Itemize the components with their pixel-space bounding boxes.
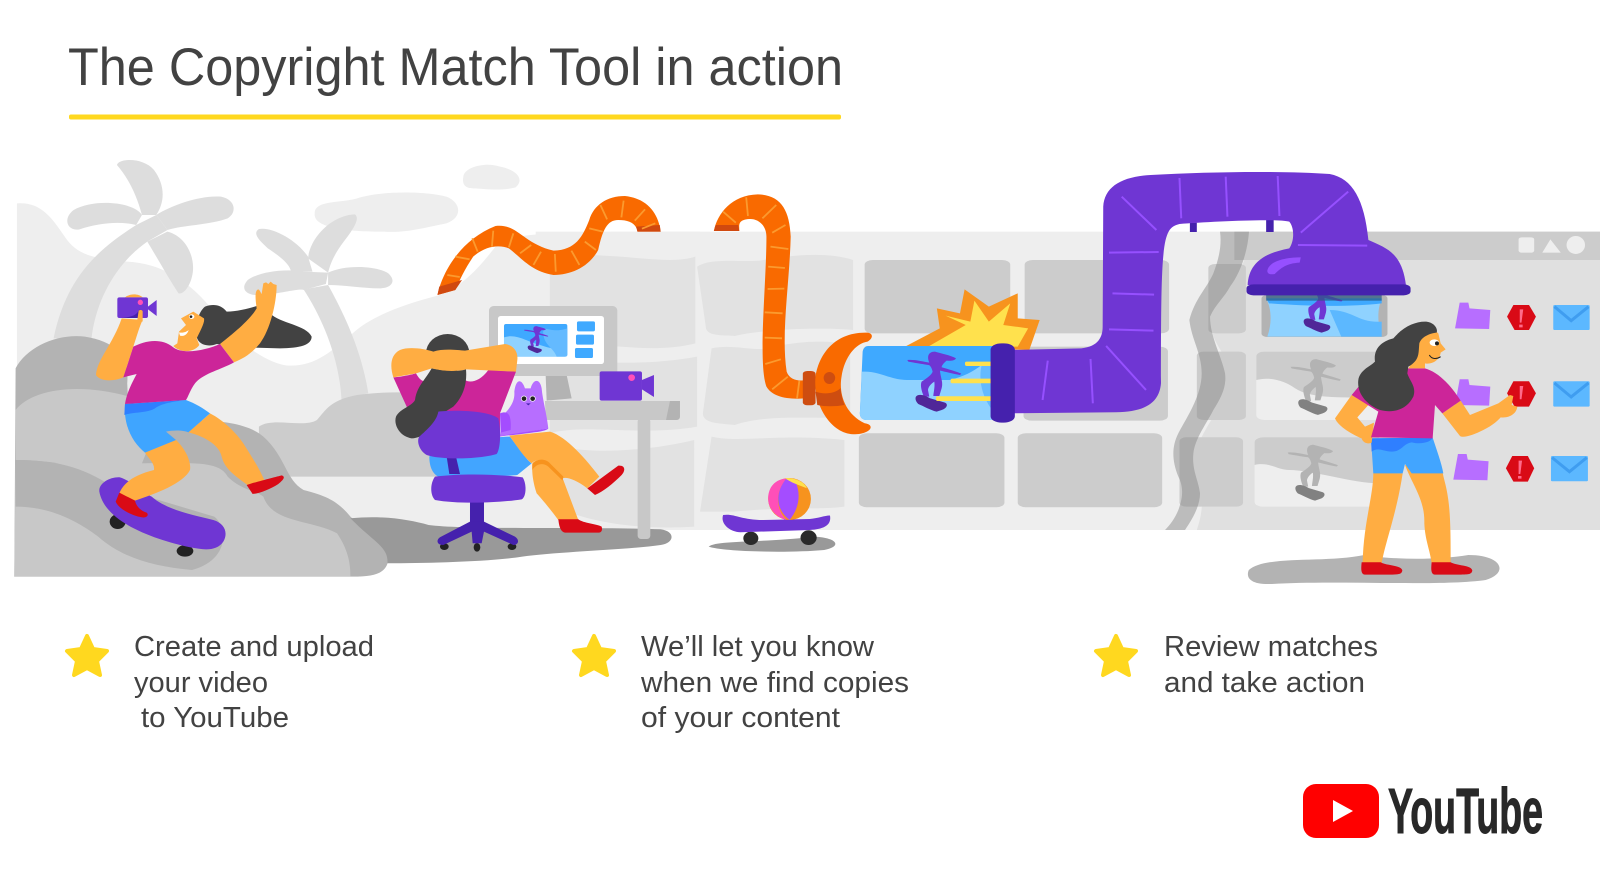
- step 2: of your content: [641, 702, 840, 734]
- cat: [500, 381, 548, 437]
- woman reviewing matches: [1335, 322, 1517, 575]
- YouTube logo: [1303, 775, 1543, 847]
- window title bar: [1234, 232, 1600, 260]
- video camera on desk: [600, 371, 654, 401]
- matched thumbnail 1: [1256, 352, 1382, 420]
- rock mound: [14, 336, 388, 577]
- step 1: Create and upload: [134, 631, 374, 663]
- office scene: [391, 306, 680, 552]
- dark blocks: [859, 260, 1246, 507]
- step 1: to YouTube: [141, 702, 289, 734]
- explosion: [905, 289, 1040, 350]
- skateboarding woman filming: [96, 282, 312, 557]
- faint left blocks: [550, 255, 853, 527]
- title: The Copyright Match Tool in action: [68, 38, 843, 97]
- orange claw: [803, 333, 872, 434]
- office chair: [418, 411, 526, 552]
- clouds: [315, 165, 520, 232]
- rear leg: [188, 413, 264, 485]
- top scan preview: [1262, 282, 1387, 337]
- ground shadow under standing woman: [1248, 555, 1500, 584]
- step 3: [1096, 631, 1378, 699]
- seated woman upper body: [391, 334, 517, 438]
- action icons row 1: [1455, 303, 1590, 330]
- window content: grid of video blocks: [550, 232, 1600, 530]
- right darker pane: [1197, 232, 1600, 530]
- front leg: [119, 440, 190, 501]
- title underline: [69, 114, 841, 120]
- skateboard and ball: [709, 478, 835, 552]
- window background: [527, 232, 1600, 530]
- step 3: and take action: [1164, 667, 1365, 699]
- action icons row 2: [1455, 379, 1590, 407]
- star icon: [1096, 636, 1136, 675]
- step 3: Review matches: [1164, 631, 1378, 663]
- scene: tropical landscape: [14, 160, 700, 577]
- handheld camera: [125, 294, 143, 297]
- scene: main transformation machinery: [709, 172, 1500, 584]
- step 1: your video: [134, 667, 268, 699]
- matched thumbnail 2: [1255, 437, 1379, 507]
- step 1: [67, 631, 374, 734]
- orange tube left: [437, 196, 661, 295]
- star icon: [574, 636, 614, 675]
- desk: [545, 401, 680, 539]
- seated woman shorts and legs: [429, 432, 624, 533]
- star icon: [67, 636, 107, 675]
- step 2: when we find copies: [640, 667, 909, 699]
- mid hill: [259, 392, 446, 477]
- orange tube right: [714, 194, 807, 399]
- step 2: We’ll let you know: [641, 631, 875, 663]
- shorts: [125, 400, 210, 453]
- monitor: [489, 306, 617, 401]
- wavy divider: [1165, 232, 1249, 530]
- step 2: [574, 631, 909, 734]
- arms and shirt: [220, 282, 277, 362]
- background hills: [17, 203, 700, 530]
- palm tree left: [54, 160, 234, 338]
- skateboard: [110, 514, 126, 529]
- video card: [860, 346, 993, 420]
- purple pipe: [991, 172, 1411, 423]
- palm tree right: [244, 214, 393, 400]
- ground shadow: [350, 517, 672, 563]
- action icons row 3: [1453, 454, 1588, 482]
